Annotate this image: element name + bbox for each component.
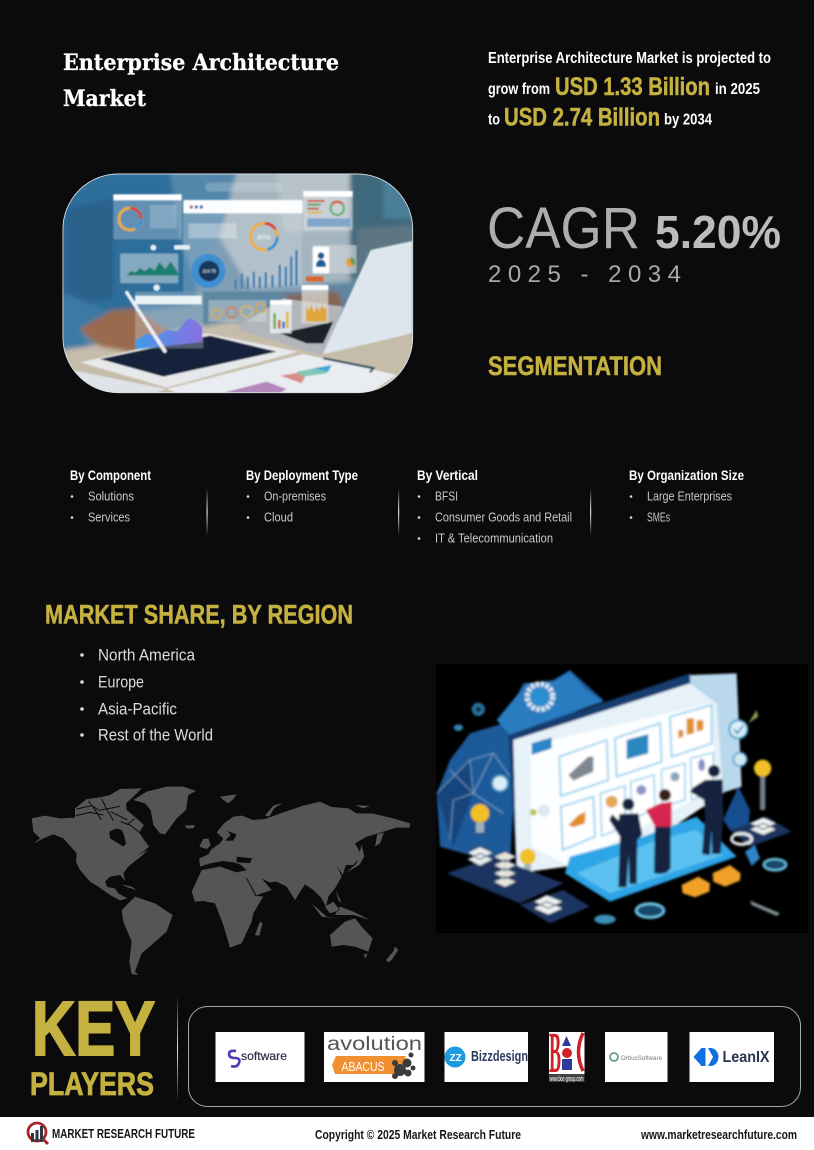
segment column: by vertical: By Vertical (417, 467, 478, 483)
cubes and chips (682, 877, 710, 897)
segment column: by component: Solutions (88, 488, 134, 504)
segment column: by component (70, 467, 151, 524)
title: Enterprise Architecture (63, 50, 339, 76)
logo: software (216, 1032, 304, 1082)
region list: Asia-Pacific (98, 700, 177, 718)
segment column: by vertical: IT & Telecommunication (435, 530, 553, 546)
key players heading (30, 986, 155, 1102)
logo: leanix (690, 1032, 774, 1082)
title: Market (63, 86, 147, 112)
central panel (183, 212, 302, 292)
region list: North America (98, 646, 195, 664)
key players heading: PLAYERS (30, 1066, 154, 1102)
segment column: by component: By Component (70, 467, 151, 483)
donuts panel (208, 300, 267, 322)
segment column: by organization size: By Organization Size (629, 467, 744, 483)
segment column: by organization size: Large Enterprises (647, 488, 732, 504)
wave panel (120, 253, 178, 283)
illustration: team at enterprise architecture board (436, 664, 808, 933)
market projection text: USD 1.33 Billion (555, 73, 710, 101)
left panel (113, 194, 182, 239)
screen back frames (690, 673, 742, 803)
CAGR figure (487, 196, 781, 288)
region list: Rest of the World (98, 726, 213, 744)
logo: bizzdesign: ZZ (450, 1053, 462, 1064)
market projection text: grow from (488, 81, 550, 98)
logo: bizzdesign (444, 1032, 528, 1082)
CAGR figure: 5.20% (655, 206, 781, 258)
segment column: by deployment type (246, 467, 358, 524)
segment column: by vertical: BFSI (435, 488, 458, 504)
yellow bar card (302, 285, 328, 323)
title (63, 50, 339, 112)
world map (32, 787, 410, 975)
footer (0, 1117, 814, 1150)
segmentation heading: SEGMENTATION (488, 351, 662, 381)
footer logo (28, 1123, 195, 1144)
logo: bizzdesign: Bizzdesign (471, 1049, 528, 1065)
green bar card (270, 300, 292, 333)
logo: BOC: www.boc-group.com (549, 1076, 584, 1083)
region list: Europe (98, 672, 144, 692)
logo: orbus software: OrbusSoftware (621, 1055, 662, 1062)
segment column: by deployment type: Cloud (264, 510, 293, 524)
search bar (205, 182, 283, 192)
lower left panel (135, 292, 203, 348)
CAGR figure: 2025 - 2034 (488, 261, 681, 288)
segment column: by organization size (629, 467, 744, 524)
market projection text (488, 50, 771, 132)
segment column: by component: Services (88, 510, 130, 524)
segment column: by deployment type: By Deployment Type (246, 467, 358, 483)
market projection text: in 2025 (715, 81, 760, 98)
top right panel (303, 191, 353, 230)
segment column: by vertical (417, 467, 572, 546)
key players panel (188, 1006, 800, 1106)
logo: avolution abacus (324, 1032, 424, 1082)
people (609, 765, 723, 887)
logo: leanix: LeanIX (722, 1049, 770, 1066)
segment column: by organization size: SMEs (647, 510, 670, 524)
photo: analyst with dashboards: 214.75 (203, 269, 216, 274)
footer logo: MARKET RESEARCH FUTURE (52, 1126, 195, 1141)
logo: BOC: B (549, 1020, 561, 1085)
logo: avolution abacus: ABACUS (342, 1060, 384, 1074)
platform (565, 817, 737, 902)
copyright: Copyright © 2025 Market Research Future (315, 1127, 521, 1142)
CAGR figure: CAGR (487, 196, 640, 261)
key players heading: KEY (32, 986, 155, 1072)
logo: orbus software (605, 1032, 668, 1082)
market share heading: MARKET SHARE, BY REGION (45, 600, 353, 630)
blue network backdrop (437, 670, 603, 867)
segment column: by vertical: Consumer Goods and Retail (435, 510, 572, 524)
segment column: by deployment type: On-premises (264, 488, 326, 504)
region list (80, 646, 213, 744)
logo: avolution abacus: avolution (327, 1034, 422, 1055)
user panel (313, 245, 357, 273)
cards (559, 740, 608, 796)
bulbs (471, 804, 489, 823)
check badges (729, 720, 747, 738)
market projection text: to (488, 112, 500, 128)
market projection text: USD 2.74 Billion (504, 104, 660, 132)
photo: analyst with dashboards (57, 172, 417, 398)
left platforms (447, 857, 563, 903)
logo: software: software (241, 1049, 287, 1063)
photo: analyst with dashboards: 80% (257, 234, 271, 241)
market projection text: by 2034 (664, 112, 712, 128)
